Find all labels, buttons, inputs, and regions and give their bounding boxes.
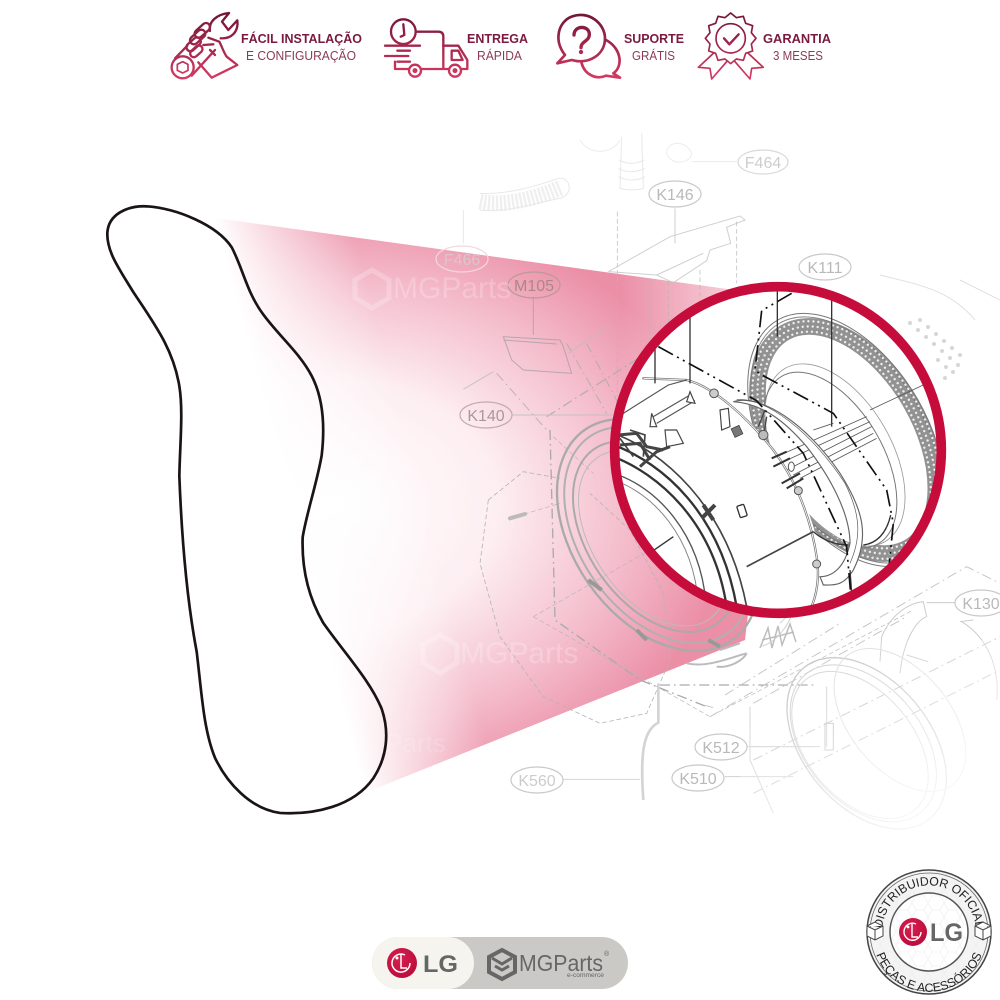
watermark lower: Parts: [385, 728, 446, 758]
text: fast delivery: RÁPIDA: [477, 48, 523, 63]
part labels: [436, 150, 1000, 793]
MGParts logo: e-commerce: [567, 973, 605, 979]
exploded parts diagram (faint): [463, 133, 1000, 870]
door ring arcs: [613, 433, 747, 607]
gasket ring product outline: [107, 206, 386, 813]
label K146: [649, 181, 701, 207]
label F466: F466: [444, 252, 480, 269]
MGParts logo: MGParts: [519, 950, 603, 976]
drum body: [752, 424, 815, 532]
icon: rosette badge with check: [698, 13, 763, 79]
benefit: easy installation: [172, 13, 362, 78]
text: warranty: GARANTIA: [763, 31, 832, 46]
drum detail drawing: [620, 292, 936, 606]
icon: delivery truck: [385, 19, 467, 77]
benefit: warranty: [698, 13, 832, 79]
label K560: K560: [518, 773, 556, 790]
label K512: [695, 734, 747, 760]
leader lines: [747, 532, 813, 567]
watermark top: MGParts: [393, 272, 511, 305]
text: easy installation: E CONFIGURAÇÃO: [246, 49, 356, 63]
text: fast delivery: [467, 31, 529, 63]
label M105: [508, 272, 560, 298]
benefit: fast delivery: [385, 19, 529, 77]
text: free support: SUPORTE: [624, 31, 684, 46]
label K140: K140: [467, 408, 505, 425]
wire bundle: [777, 417, 877, 478]
perforated panel outside the circle: [880, 275, 1000, 380]
struts and clips: [623, 380, 695, 423]
red circle frame: [615, 287, 941, 613]
label K111: K111: [808, 260, 843, 277]
front hoop wire: [643, 378, 818, 610]
seal text bottom: PEÇAS E ACESSÓRIOS: [876, 952, 981, 992]
upper parts: hoses, bracket, dispenser: [463, 133, 745, 430]
label K510: K510: [679, 771, 717, 788]
rear drum rim: [747, 312, 936, 567]
spring clamp below the circle: [760, 624, 796, 648]
label K510: [672, 765, 724, 791]
LG logo: [387, 948, 458, 978]
seal LG logo: LG: [930, 919, 963, 947]
seal box icons: [867, 922, 991, 940]
benefit: free support: [557, 15, 684, 78]
magnified detail circle: [610, 282, 946, 618]
text: easy installation: FÁCIL INSTALAÇÃO: [241, 31, 362, 46]
watermark middle: MGParts: [460, 637, 578, 670]
watermarks: [355, 270, 578, 758]
pink zoom cone: [100, 150, 785, 850]
label F464: F464: [745, 155, 781, 172]
label K512: K512: [702, 740, 740, 757]
fade on lower parts: [740, 640, 1000, 870]
watermark top: [355, 270, 511, 308]
text: warranty: 3 MESES: [773, 49, 823, 63]
label F466: [436, 246, 488, 272]
icon: speech bubbles with question mark: [557, 15, 620, 78]
door ring clamps: [618, 430, 715, 520]
label K130: K130: [962, 596, 1000, 613]
middle hoop band: [733, 400, 863, 585]
label K130: [955, 590, 1000, 616]
icon: wrench and hand: [172, 13, 237, 78]
label K111: [799, 254, 851, 280]
text: free support: [624, 31, 684, 63]
MGParts logo: ®: [604, 950, 610, 958]
bottom brand pill: [372, 937, 628, 989]
LG logo: LG: [423, 951, 458, 978]
distributor seal: [866, 869, 992, 995]
middle parts: front ring and dashed box: [480, 381, 913, 800]
label M105: M105: [514, 278, 554, 295]
label K146: K146: [656, 187, 694, 204]
label F464: [738, 150, 788, 174]
black dash-dot outline: [658, 293, 893, 593]
watermark middle: [423, 635, 578, 673]
text: easy installation: [241, 31, 362, 63]
label K560: [511, 767, 563, 793]
lower-right door gasket parts: [703, 567, 1000, 859]
MGParts logo: [489, 950, 610, 979]
text: free support: GRÁTIS: [632, 48, 675, 63]
label K140: [460, 402, 512, 428]
seal text top: DISTRIBUIDOR OFICIAL: [874, 877, 984, 927]
text: warranty: [763, 31, 832, 63]
text: fast delivery: ENTREGA: [467, 31, 529, 46]
